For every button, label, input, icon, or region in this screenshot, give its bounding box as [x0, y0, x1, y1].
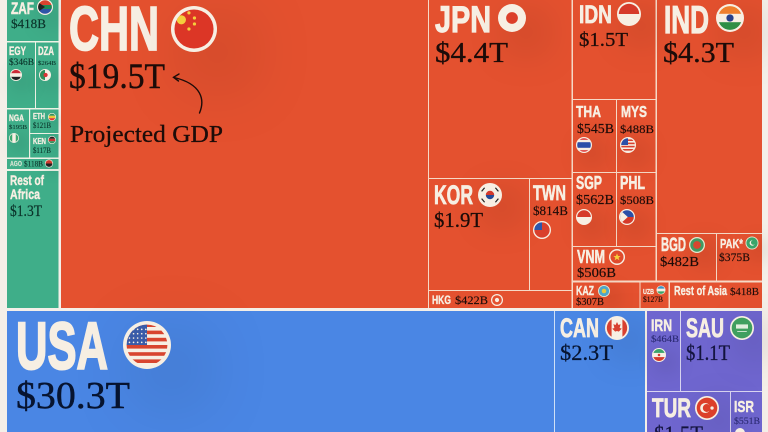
- cell: SGP: SGP: [576, 173, 602, 193]
- cell: EGY: [9, 46, 34, 81]
- cell: CAN: [560, 313, 629, 365]
- cell: IDN: IDN: [579, 1, 612, 29]
- cell: IRN: IRN: [651, 317, 672, 335]
- cell: ZAF: [11, 0, 53, 31]
- cell: TUR: [652, 393, 719, 432]
- cell: PHL: $508B: [620, 193, 654, 207]
- cell: IND: IND: [664, 0, 709, 42]
- cell: TWN: $814B: [533, 203, 568, 218]
- cell: IRN: $464B: [651, 334, 679, 345]
- cell: DZA: $264B: [38, 60, 57, 67]
- cell: HKG: $422B: [455, 293, 488, 307]
- cell: Rest of Africa: $1.3T: [10, 203, 42, 220]
- cell: KOR: $1.9T: [434, 208, 483, 232]
- cell: Rest of Asia: Rest of Asia: [674, 284, 728, 298]
- cell: NGA: [9, 113, 28, 143]
- cell: ISR: ISR: [734, 399, 754, 416]
- cell: ISR: [734, 399, 760, 432]
- cell: NGA: NGA: [9, 113, 24, 124]
- cell: USA: $30.3T: [16, 375, 130, 417]
- cell: HKG: [432, 293, 503, 307]
- cell: UZB: UZB: [643, 287, 654, 296]
- cell: KEN: [33, 136, 56, 155]
- cell: UZB: $127B: [643, 295, 663, 304]
- cell: THA: $545B: [577, 121, 614, 136]
- cell: JPN: [435, 0, 526, 69]
- panel: Africa: [7, 0, 59, 308]
- cell: EGY: EGY: [9, 46, 26, 58]
- cell: AGO: AGO: [10, 159, 22, 168]
- cell: IND: [663, 0, 744, 69]
- callout: Projected GDP: Projected GDP: [70, 122, 223, 148]
- cell: EGY: $346B: [9, 57, 34, 68]
- cell: SGP: $562B: [576, 192, 614, 207]
- cell: BGD: BGD: [661, 235, 686, 256]
- cell: Rest of Asia: $418B: [730, 286, 759, 298]
- cell: MYS: $488B: [620, 122, 654, 136]
- icon: China flag: [171, 6, 217, 52]
- cell: USA: USA: [16, 310, 108, 384]
- cell: THA: [576, 104, 614, 153]
- cell: TUR: TUR: [652, 393, 691, 423]
- cell: PAK: $375B: [719, 250, 750, 264]
- cell: Rest of Africa: Rest of: [10, 172, 44, 188]
- cell: VNM: VNM: [577, 247, 605, 267]
- cell: TWN: [533, 182, 568, 239]
- cell: MYS: MYS: [621, 104, 647, 121]
- cell: SAU: [686, 313, 754, 365]
- cell: VNM: [577, 247, 625, 281]
- cell: CHN: $19.5T: [69, 56, 165, 96]
- panel: North America: [7, 310, 645, 432]
- cell: IDN: [579, 1, 641, 51]
- cell: BGD: [660, 235, 705, 270]
- panel: Middle East: [647, 311, 762, 432]
- icon: USA flag: [123, 321, 171, 369]
- cell: PHL: [619, 173, 654, 225]
- cell: SGP: [576, 173, 614, 225]
- cell: PAK: [719, 236, 758, 264]
- cell: ETH: $121B: [33, 121, 51, 130]
- cell: Rest of Africa: Africa: [10, 186, 40, 202]
- cell: ZAF: $418B: [11, 16, 46, 31]
- cell: BGD: $482B: [660, 255, 699, 270]
- cell: KAZ: KAZ: [576, 283, 594, 298]
- cell: JPN: $4.4T: [435, 38, 508, 69]
- cell: KEN: KEN: [33, 136, 46, 146]
- cell: KEN: $117B: [33, 146, 51, 155]
- cell: KAZ: [576, 283, 610, 308]
- cell: DZA: DZA: [38, 46, 54, 58]
- cell: PAK: PAK*: [720, 237, 743, 251]
- cell: KOR: [434, 180, 502, 232]
- cell: UZB: [643, 286, 666, 304]
- cell: Rest of Africa: [10, 172, 44, 220]
- cell: VNM: $506B: [577, 266, 616, 281]
- cell: AGO: [10, 159, 53, 168]
- cell: THA: THA: [576, 104, 601, 121]
- cell: AGO: $118B: [24, 160, 43, 168]
- cell: IRN: [651, 317, 679, 362]
- cell: TWN: TWN: [533, 182, 566, 205]
- cell: KAZ: $307B: [576, 297, 604, 308]
- cell: HKG: HKG: [432, 295, 451, 307]
- cell: SAU: SAU: [686, 313, 724, 343]
- cell: IND: $4.3T: [663, 38, 734, 69]
- cell: CAN: $2.3T: [560, 340, 614, 365]
- panel: Asia: [61, 0, 762, 308]
- cell: ISR: $551B: [734, 416, 760, 427]
- cell: ETH: [33, 111, 56, 130]
- cell: ETH: ETH: [33, 111, 45, 121]
- cell: DZA: [38, 46, 57, 81]
- cell: CAN: CAN: [560, 313, 599, 343]
- cell: MYS: [620, 104, 654, 153]
- cell: SAU: $1.1T: [686, 340, 730, 365]
- cell: PHL: PHL: [620, 173, 645, 193]
- cell: KOR: KOR: [434, 180, 473, 210]
- cell: NGA: $195B: [9, 124, 28, 131]
- arrow: to GDP value: [174, 74, 202, 113]
- cell: USA: [16, 310, 171, 417]
- cell: IDN: $1.5T: [579, 29, 628, 51]
- cell: CHN: [69, 0, 217, 96]
